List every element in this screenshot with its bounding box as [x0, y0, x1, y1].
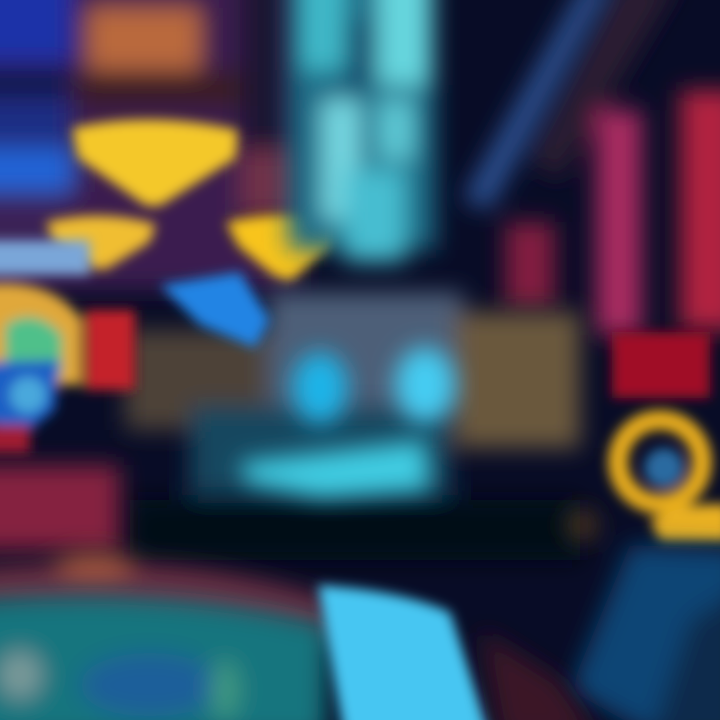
floor: lower centre dark red: [480, 630, 600, 720]
table: teal felt: [0, 596, 328, 720]
right side: dark wall with diagonal blue streak and red drapes: [462, 0, 720, 335]
table: bright cyan edge: [318, 585, 492, 720]
light columns: cyan ceiling panels: [288, 0, 436, 262]
table: rim: [0, 553, 330, 640]
screen: blue angled panel: [160, 272, 270, 348]
right decor: red block: [612, 332, 710, 398]
lamp: right yellow pendant: [226, 215, 336, 282]
screen: right cyan spot: [395, 347, 455, 423]
floor: maroon carpet: [0, 465, 120, 550]
lamp: left yellow pendant: [46, 215, 156, 270]
screen: left cyan spot: [292, 352, 348, 424]
lamp: large yellow pendant: [72, 119, 238, 206]
ceiling: upper left colour blocks: [0, 0, 310, 290]
centre: slot machines and blue screen: [125, 292, 580, 560]
left side: rainbow game machine: [0, 240, 135, 453]
screen: cyan lower band: [240, 440, 430, 498]
right decor: yellow ring: [618, 420, 720, 542]
right lower: blue seat: [566, 509, 720, 720]
